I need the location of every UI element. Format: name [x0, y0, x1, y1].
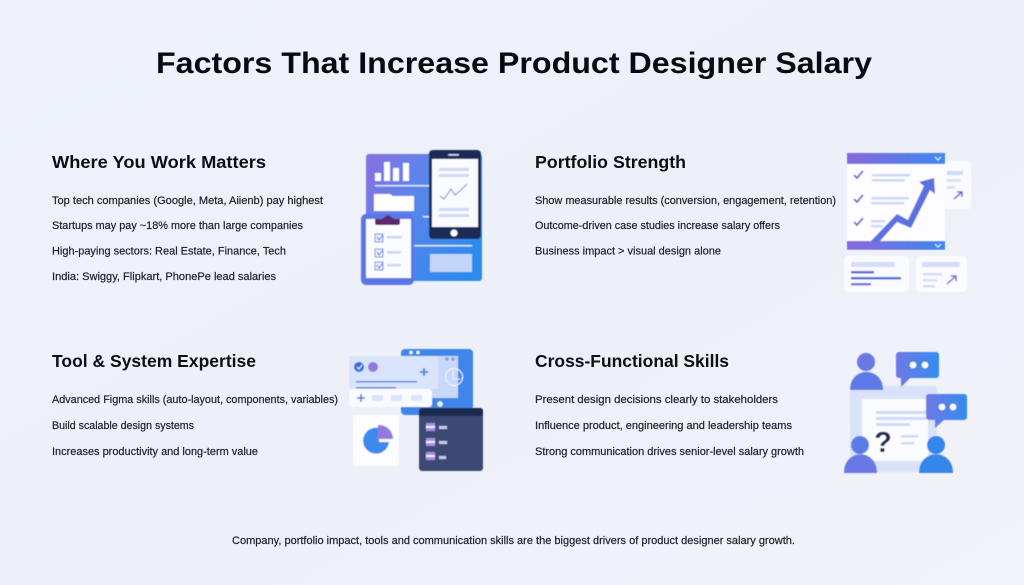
text block: tool bullets: Increases productivity and long-term value	[52, 446, 258, 458]
text block: tool bullets	[52, 394, 338, 458]
text block: portfolio bullets: Outcome-driven case studies increase salary offers	[535, 220, 780, 232]
text block: portfolio bullets: Show measurable results (conversion, engagement, retention)	[535, 195, 836, 207]
text block: where you work bullets: Startups may pay ~18% more than large companies	[52, 220, 303, 232]
panel: tool and system expertise	[52, 351, 338, 458]
icon: design tool windows and pie chart	[349, 349, 483, 471]
text block: tool bullets: Advanced Figma skills (auto-layout, components, variables)	[52, 394, 338, 406]
text block: tool bullets: Build scalable design systems	[52, 420, 194, 432]
icon: growth chart with cards	[844, 153, 971, 292]
text block: where you work bullets	[52, 195, 323, 283]
panel: cross-functional skills	[535, 351, 804, 458]
title: Factors That Increase Product Designer Salary	[156, 47, 872, 80]
text block: cross-functional bullets: Strong communication drives senior-level salary growth	[535, 446, 804, 458]
heading: portfolio strength: Portfolio Strength	[535, 152, 686, 172]
footer note: Company, portfolio impact, tools and communication skills are the biggest drivers of product designer salary growth.	[232, 535, 795, 547]
heading: where you work: Where You Work Matters	[52, 152, 266, 172]
text block: cross-functional bullets: Influence product, engineering and leadership teams	[535, 420, 792, 432]
icon: dashboard, phone and clipboard	[361, 150, 482, 285]
panel: portfolio strength	[535, 152, 836, 258]
heading: cross-functional: Cross-Functional Skills	[535, 351, 729, 371]
text block: cross-functional bullets: Present design decisions clearly to stakeholders	[535, 394, 779, 406]
text block: portfolio bullets: Business impact > visual design alone	[535, 246, 721, 258]
text block: where you work bullets: Top tech companies (Google, Meta, Aiienb) pay highest	[52, 195, 323, 207]
text block: cross-functional bullets	[535, 394, 804, 458]
icon: people conversation: ?	[874, 427, 892, 459]
icon: people conversation	[844, 352, 967, 473]
heading: tool and system: Tool & System Expertise	[52, 351, 256, 371]
text block: portfolio bullets	[535, 195, 836, 258]
text block: where you work bullets: High-paying sectors: Real Estate, Finance, Tech	[52, 246, 286, 258]
text block: where you work bullets: India: Swiggy, Flipkart, PhonePe lead salaries	[52, 271, 276, 283]
panel: where you work matters	[52, 152, 323, 283]
